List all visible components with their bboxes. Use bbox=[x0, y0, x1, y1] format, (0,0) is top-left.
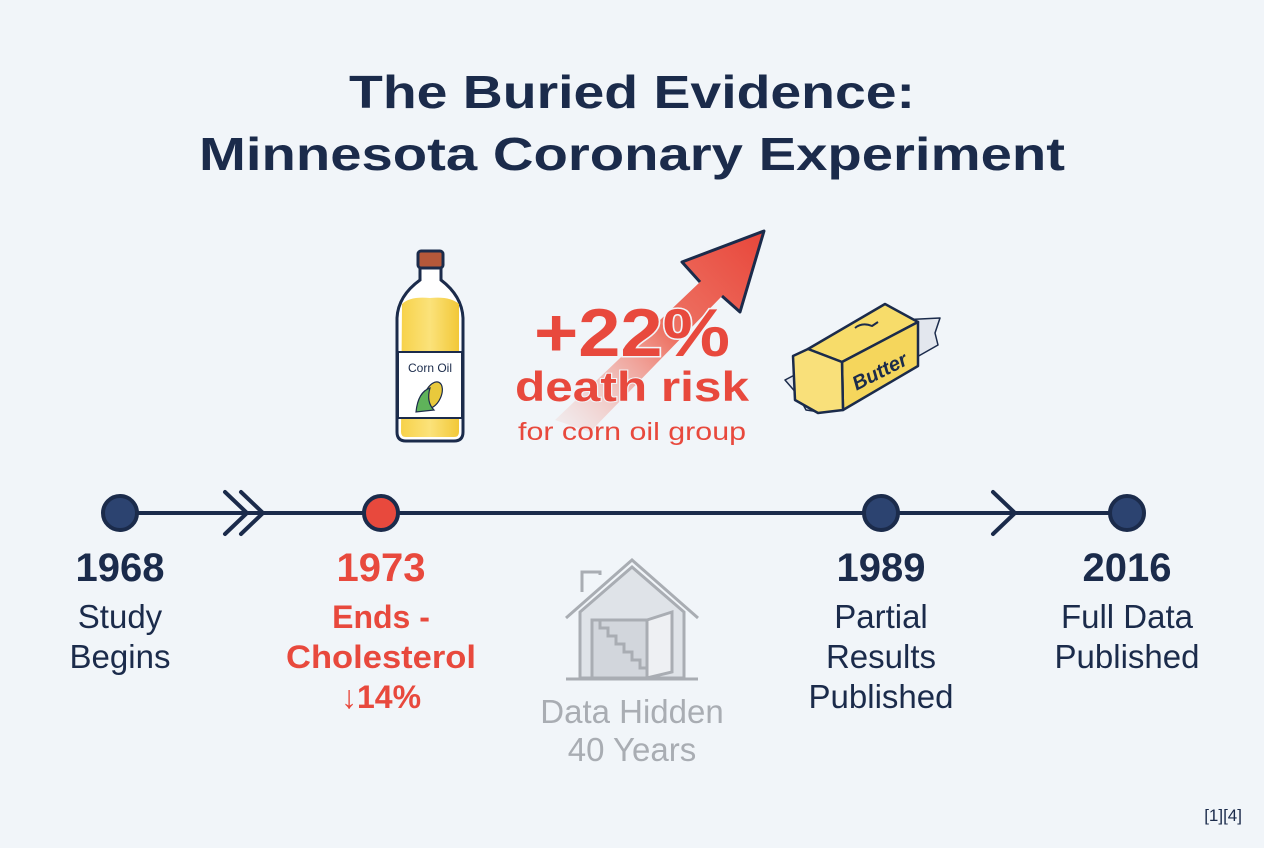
event: data hidden bbox=[540, 693, 724, 768]
icon: butter bbox=[785, 304, 940, 413]
event: 1989: Partial bbox=[834, 598, 928, 635]
citation: [1][4] bbox=[1204, 806, 1242, 825]
event: 1968: Study bbox=[78, 598, 163, 635]
title: Minnesota Coronary Experiment bbox=[199, 128, 1065, 180]
timeline dots bbox=[103, 496, 1144, 530]
event: 1968 bbox=[70, 546, 170, 675]
event: 2016: Full Data bbox=[1061, 598, 1194, 635]
event: 2016 bbox=[1055, 546, 1199, 675]
event: 1989: 1989 bbox=[837, 546, 925, 590]
arrow: rising risk bbox=[555, 231, 764, 432]
event: 1968: Begins bbox=[70, 638, 170, 675]
event: 1989: Published bbox=[809, 678, 953, 715]
event: 1973: ↓14% bbox=[341, 679, 421, 715]
event: 2016: 2016 bbox=[1083, 546, 1171, 590]
event: 1989: Results bbox=[826, 638, 936, 675]
callout: +22% death risk bbox=[515, 295, 750, 446]
event: 1973 bbox=[286, 546, 476, 715]
icon: butter: Butter bbox=[849, 348, 912, 395]
event: data hidden: Data Hidden bbox=[540, 693, 724, 730]
event: 1973: Ends - bbox=[332, 599, 430, 635]
title: The Buried Evidence: bbox=[349, 66, 915, 118]
title bbox=[199, 66, 1065, 180]
callout: +22% death risk: for corn oil group bbox=[518, 418, 746, 446]
icon: corn oil bottle bbox=[397, 251, 463, 441]
icon: hidden basement house bbox=[566, 560, 698, 679]
event: data hidden: 40 Years bbox=[568, 731, 696, 768]
callout: +22% death risk: death risk bbox=[515, 363, 750, 410]
event: 1973: 1973 bbox=[337, 546, 425, 590]
timeline line bbox=[120, 492, 1127, 534]
event: 1973: Cholesterol bbox=[286, 639, 476, 675]
icon: corn oil bottle: Corn Oil bbox=[408, 361, 452, 375]
event: 1989 bbox=[809, 546, 953, 715]
event: 1968: 1968 bbox=[76, 546, 164, 590]
event: 2016: Published bbox=[1055, 638, 1199, 675]
callout: +22% death risk: +22% bbox=[534, 295, 730, 371]
